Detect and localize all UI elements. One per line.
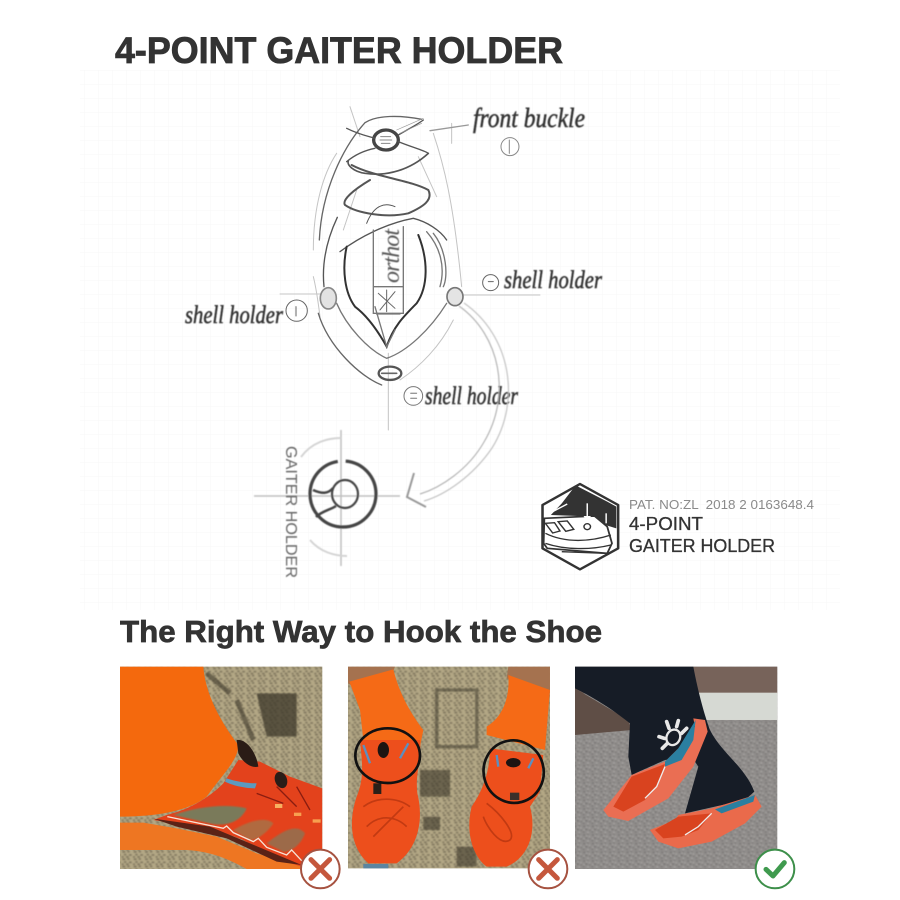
leader line to label (430, 125, 468, 131)
icon: hexagon shoe badge (543, 484, 618, 569)
sketch label: shell holder right: shell holder (504, 267, 602, 294)
patent number: PAT. NO:ZL 2018 2 0163648.4 (629, 497, 814, 512)
skin (348, 667, 550, 693)
icon: wrong cross (529, 850, 567, 888)
circled numbers (501, 138, 519, 156)
sketch label: gaiter holder vertical: GAITER HOLDER (282, 446, 299, 578)
shell holders (320, 288, 336, 309)
curved arrow to gaiter holder detail (407, 303, 508, 507)
heading: right way to hook: The Right Way to Hook the Shoe (120, 614, 602, 649)
buckle (237, 740, 258, 767)
icon: wrong cross (301, 850, 340, 888)
badge label: GAITER HOLDER (629, 535, 775, 556)
construction lines (280, 107, 540, 430)
sketch label: orthot on tongue: orthot (379, 228, 405, 283)
sketch label: front buckle: front buckle (473, 103, 585, 133)
front shoe (650, 795, 762, 848)
shoes (352, 740, 420, 863)
icon: correct check (756, 850, 794, 888)
midsole (120, 823, 310, 869)
pants (120, 667, 238, 817)
outer sole outline (319, 116, 422, 240)
photo 3: correct way, runner (568, 660, 794, 888)
black marker circles (355, 728, 420, 783)
socks (349, 669, 423, 747)
badge label: 4-POINT (629, 513, 703, 534)
badge label (629, 513, 775, 556)
shoe upper (153, 760, 322, 869)
sun logo (659, 721, 687, 748)
pencil sketch of shoe top view (280, 107, 540, 430)
sketch label: shell holder bottom: shell holder (425, 383, 518, 410)
sketch label: shell holder left: shell holder (185, 302, 283, 329)
patent badge (543, 484, 814, 569)
photo 2: gaiter on wrong, top view (341, 660, 567, 888)
tongue (344, 235, 426, 347)
photo 1: gaiter on wrong, side view (113, 660, 340, 888)
rear shoe (603, 718, 708, 821)
title: 4-POINT GAITER HOLDER (115, 30, 563, 71)
laces (347, 120, 428, 162)
legs and gaiters (575, 667, 754, 813)
gaiter holder detail drawing (254, 430, 400, 566)
front buckle (374, 130, 398, 150)
